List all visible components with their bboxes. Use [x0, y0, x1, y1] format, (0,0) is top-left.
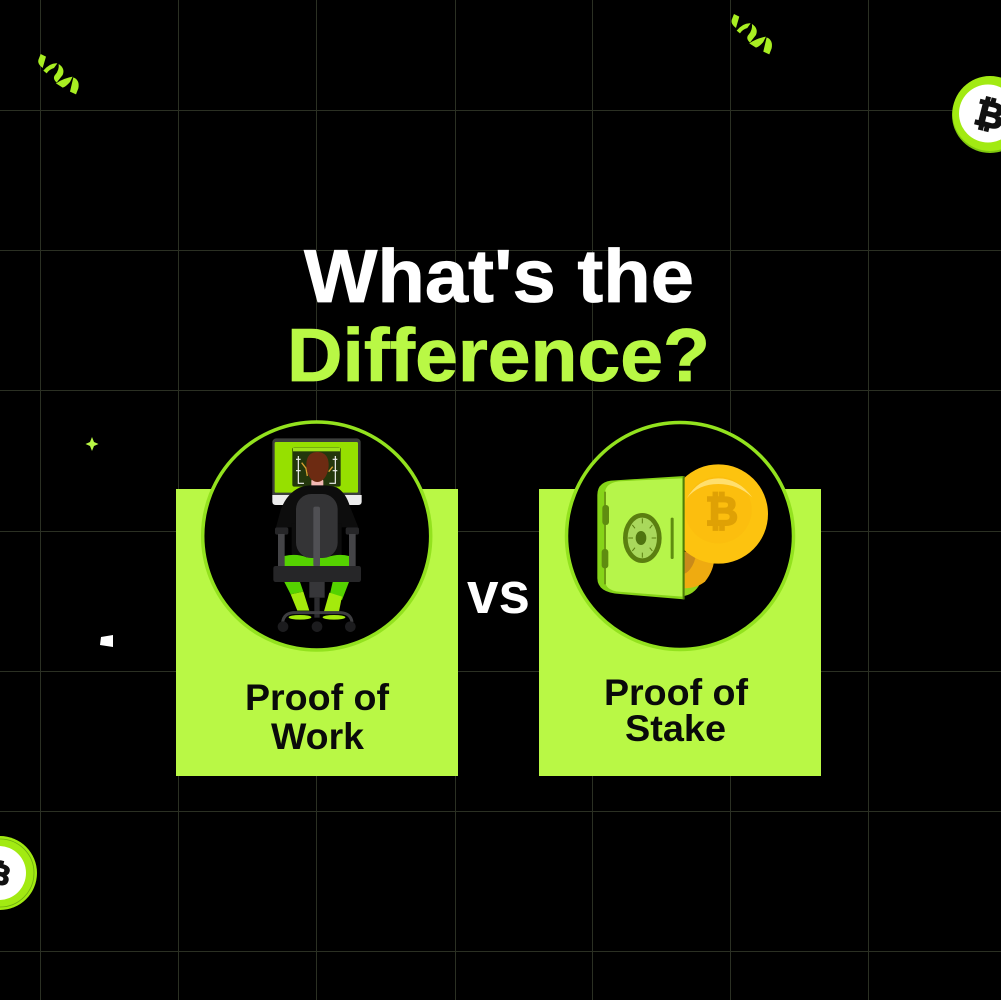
panel: proof of work: [176, 422, 458, 776]
icon: safe with bitcoin: [566, 422, 794, 650]
icon: squiggle top left: [38, 54, 79, 94]
icon: safe with bitcoin: ₿: [705, 487, 738, 535]
label: proof of stake: Stake: [625, 708, 726, 749]
icon: worker at computer: [203, 422, 431, 650]
icon: sparkle: [86, 437, 98, 451]
label: proof of work: Proof of: [245, 677, 390, 718]
panel: proof of stake: [539, 422, 821, 776]
icon: white fragment: [100, 635, 113, 647]
title: Difference?: [287, 313, 710, 397]
label: proof of work: [245, 677, 390, 757]
icon: squiggle top right: [731, 14, 772, 54]
label: proof of stake: [604, 672, 749, 749]
title: What's the: [304, 234, 694, 318]
icon: bitcoin coin top right: [952, 76, 1001, 153]
label: proof of stake: Proof of: [604, 672, 749, 713]
title: [287, 234, 710, 397]
label: proof of work: Work: [271, 716, 364, 757]
icon: bitcoin coin bottom left: [0, 836, 37, 910]
vs label: vs: [467, 561, 530, 626]
